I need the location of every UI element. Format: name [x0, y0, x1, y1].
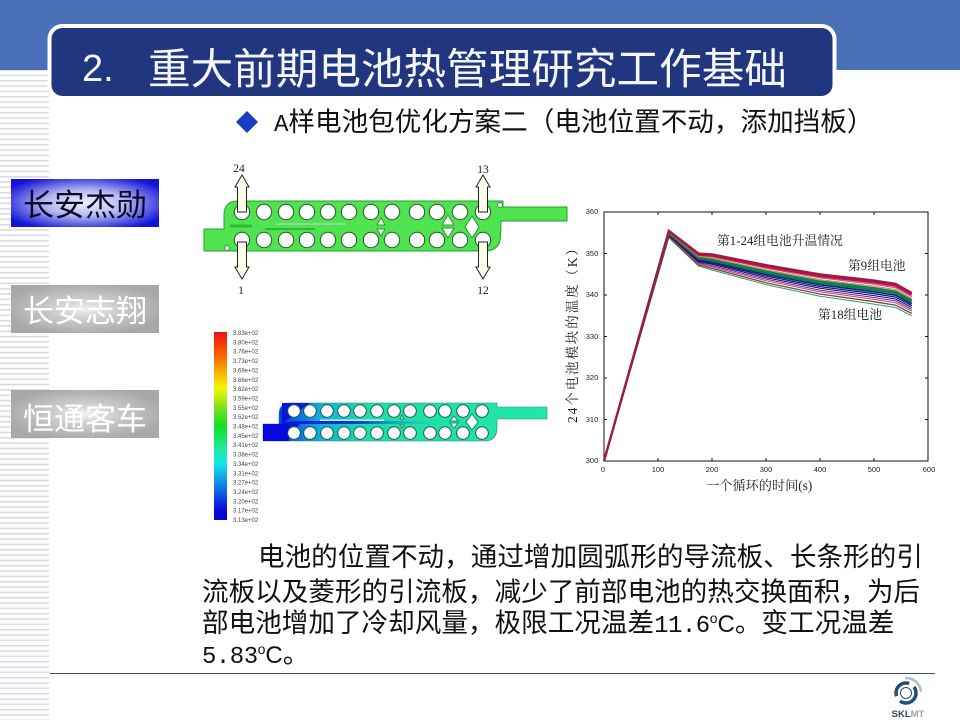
description text: 电池的位置不动，通过增加圆弧形的导流板、长条形的引	[258, 542, 923, 572]
battery pack airflow diagram	[204, 163, 567, 297]
subtitle: A样电池包优化方案二（电池位置不动，添加挡板）	[274, 107, 873, 139]
axis values: 600	[923, 465, 935, 474]
button: 恒通客车: 恒通客车	[23, 402, 147, 437]
y axis title: 24个电池模块的温度（K）	[564, 240, 580, 423]
temperature legend: 3.31e+02	[233, 471, 259, 477]
button: 长安杰勋: 长安杰勋	[23, 188, 147, 223]
cell group numbers: 12	[477, 285, 489, 297]
cell group numbers	[233, 163, 489, 297]
axis ticks	[604, 212, 928, 461]
temperature legend: 3.52e+02	[233, 415, 259, 421]
temperature legend: 3.83e+02	[233, 331, 259, 337]
header band	[0, 0, 960, 70]
x axis title: 一个循环的时间(s)	[706, 478, 812, 493]
description text: 5.83	[202, 644, 258, 671]
axis values: 310	[586, 415, 598, 424]
axis values: 0	[601, 465, 605, 474]
axis values: 350	[586, 249, 598, 258]
temperature legend	[214, 331, 259, 524]
outlet arrows	[235, 175, 490, 279]
title bar: 重大前期电池热管理研究工作基础	[148, 46, 787, 94]
axis values	[586, 207, 935, 474]
description text: C	[718, 611, 735, 638]
axis values: 360	[586, 207, 598, 216]
temperature legend: 3.73e+02	[233, 359, 259, 365]
description text: o	[710, 610, 718, 626]
axis values: 300	[586, 456, 598, 465]
logo: SKLMT: SKLMT	[892, 709, 925, 720]
button: 长安志翔: 长安志翔	[23, 294, 147, 329]
description text: 流板以及菱形的引流板，减少了前部电池的热交换面积，为后	[202, 577, 920, 607]
description text: 部电池增加了冷却风量，极限工况温差11.6	[202, 608, 710, 640]
temperature legend: 3.24e+02	[233, 490, 259, 496]
axis values: 330	[586, 332, 598, 341]
temperature legend: 3.13e+02	[233, 518, 259, 524]
logo: SKLMT	[892, 678, 925, 720]
button: 长安杰勋	[11, 179, 159, 227]
temperature legend: 3.62e+02	[233, 387, 259, 393]
axis values: 200	[706, 465, 718, 474]
footer rule	[50, 673, 935, 674]
battery cells	[288, 405, 488, 439]
temperature legend: 3.59e+02	[233, 396, 259, 402]
thermal contour diagram	[263, 403, 547, 441]
temperature legend: 3.76e+02	[233, 350, 259, 356]
temperature legend: 3.55e+02	[233, 406, 259, 412]
axis values: 340	[586, 290, 598, 299]
cell group numbers: 1	[238, 285, 244, 297]
temperature legend: 3.69e+02	[233, 368, 259, 374]
button: 恒通客车	[11, 390, 159, 438]
axis values: 300	[760, 465, 772, 474]
temperature legend: 3.80e+02	[233, 340, 259, 346]
axis values: 400	[814, 465, 826, 474]
axis values: 100	[652, 465, 664, 474]
temperature legend: 3.17e+02	[233, 509, 259, 515]
temperature curves	[604, 231, 912, 461]
temperature legend: 3.41e+02	[233, 443, 259, 449]
temperature legend: 3.34e+02	[233, 462, 259, 468]
title bar: 2.	[82, 48, 114, 90]
description text	[202, 542, 923, 671]
striped left margin	[0, 70, 49, 720]
button: 长安志翔	[11, 285, 159, 333]
description text: C	[265, 642, 283, 669]
temperature legend: 3.38e+02	[233, 453, 259, 459]
temperature legend: 3.48e+02	[233, 424, 259, 430]
flow streaks	[230, 224, 345, 229]
description text: o	[258, 641, 266, 657]
chart annotations: 第1-24组电池升温情况	[717, 233, 843, 248]
temperature legend: 3.20e+02	[233, 499, 259, 505]
cell group numbers: 24	[233, 163, 245, 175]
temperature legend: 3.45e+02	[233, 434, 259, 440]
title bar	[50, 26, 834, 98]
cold inlet region	[263, 403, 440, 441]
battery cells	[224, 202, 502, 250]
description text: 。	[283, 639, 309, 669]
line chart: battery module temperature: 第18组电池	[818, 307, 882, 322]
cell group numbers: 13	[477, 164, 489, 176]
line chart: battery module temperature	[564, 207, 935, 493]
temperature legend: 3.27e+02	[233, 481, 259, 487]
temperature legend: 3.66e+02	[233, 378, 259, 384]
line chart: battery module temperature: 第9组电池	[848, 258, 906, 273]
axis values: 500	[868, 465, 880, 474]
axis values: 320	[586, 373, 598, 382]
description text: 。变工况温差	[735, 608, 894, 638]
